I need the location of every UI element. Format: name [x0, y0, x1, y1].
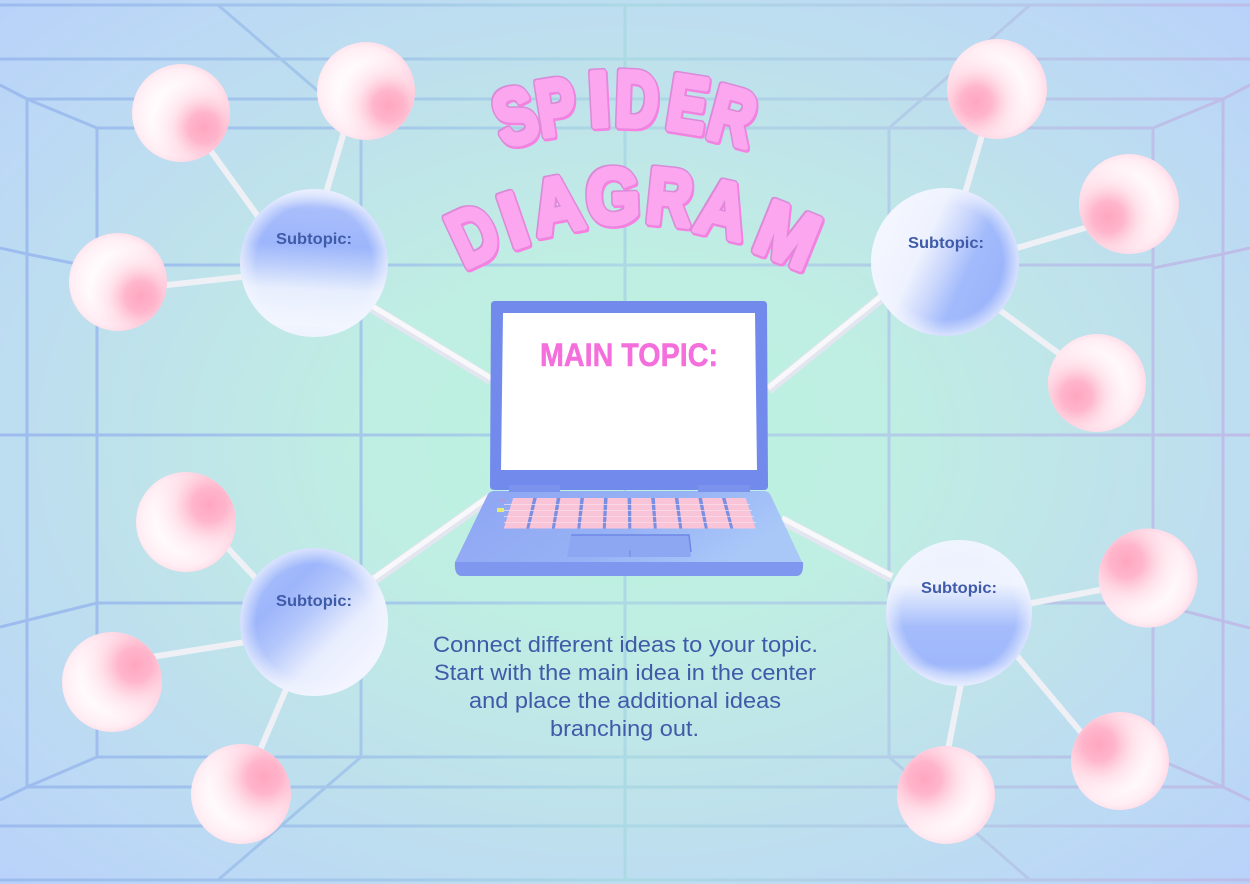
title word: spider: D: [614, 54, 660, 144]
cluster: top-right subtopic: [871, 39, 1179, 432]
branches bottom-left: [145, 540, 290, 755]
node: pink ball 2: [62, 632, 162, 732]
laptop front edge: [455, 562, 803, 576]
title word: spider: [483, 54, 765, 164]
laptop lid: [490, 301, 768, 490]
description text: branching out.: [550, 716, 699, 741]
laptop deck: [455, 491, 802, 562]
trackpad: [567, 535, 691, 557]
label: subtopic: Subtopic:: [921, 580, 997, 597]
node: pink ball 3: [191, 744, 291, 844]
node: pink ball 2: [317, 42, 415, 140]
node: blue subtopic ball: [240, 548, 388, 696]
hinges: [509, 485, 750, 492]
connector: laptop to top-left subtopic: [372, 306, 491, 380]
node: pink ball 3: [897, 746, 995, 844]
branches bottom-right: [947, 588, 1110, 755]
title word: spider: P: [530, 61, 582, 154]
node: pink ball 1: [1098, 528, 1198, 628]
label: subtopic: Subtopic:: [276, 593, 352, 610]
keyboard: [504, 498, 756, 528]
node: pink ball 1: [132, 64, 230, 162]
description text: Connect different ideas to your topic.: [433, 632, 818, 657]
connector: laptop to bottom-left subtopic: [374, 495, 491, 580]
title word: spider: S: [483, 69, 547, 164]
description text: Start with the main idea in the center: [434, 660, 816, 685]
title word: spider: R: [700, 69, 765, 164]
indicator lights: [497, 499, 506, 512]
node: pink ball 3: [1048, 334, 1146, 432]
title word: spider: I: [586, 54, 612, 144]
title word: diagram: G: [585, 151, 641, 241]
label: subtopic: Subtopic:: [276, 231, 352, 248]
node: pink ball 2: [1071, 712, 1169, 810]
title word: spider: E: [662, 58, 714, 151]
title word: diagram: A: [524, 157, 590, 253]
title word: diagram: A: [689, 160, 757, 257]
cluster: bottom-left subtopic: [62, 472, 388, 844]
node: pink ball 1: [136, 472, 236, 572]
label: subtopic: Subtopic:: [908, 235, 984, 252]
node: pink ball 2: [1079, 154, 1179, 254]
title word: diagram: M: [744, 184, 831, 287]
cluster: top-left subtopic: [69, 42, 415, 337]
connector: laptop to bottom-right subtopic: [782, 518, 892, 578]
connector: laptop to top-right subtopic: [768, 293, 885, 390]
description text: [433, 632, 818, 741]
node: pink ball 3: [69, 233, 167, 331]
main topic label: MAIN TOPIC:: [540, 337, 718, 373]
node: blue subtopic ball: [886, 540, 1032, 686]
node: blue subtopic ball: [240, 189, 388, 337]
title word: diagram: R: [643, 151, 697, 243]
cluster: bottom-right subtopic: [886, 528, 1198, 844]
laptop screen: [501, 313, 757, 470]
title: spider diagram: [435, 54, 831, 287]
title word: diagram: D: [435, 186, 512, 284]
node: pink ball 1: [947, 39, 1047, 139]
title word: diagram: I: [488, 175, 538, 265]
branches top-right: [963, 125, 1095, 358]
laptop illustration: [455, 301, 803, 576]
node: blue subtopic ball: [871, 188, 1019, 336]
branches top-left: [158, 125, 346, 286]
description text: and place the additional ideas: [469, 688, 781, 713]
title word: diagram: [435, 151, 831, 287]
